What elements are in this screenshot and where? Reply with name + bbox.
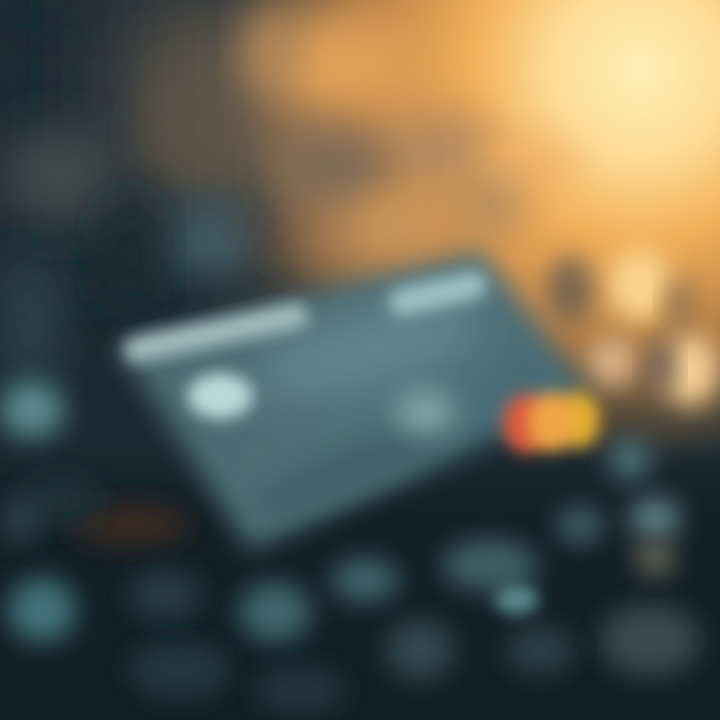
background: dark lower field bbox=[0, 440, 720, 720]
background: golden light bbox=[220, 0, 720, 500]
card: lower shadow tone bbox=[240, 408, 460, 532]
card: name strip highlight bbox=[121, 301, 311, 365]
card: chip highlight bbox=[187, 373, 253, 419]
card: top right logo highlight bbox=[386, 269, 490, 318]
card: payment logo bbox=[503, 392, 600, 454]
card: light top sheen bbox=[245, 285, 495, 415]
card: tilted credit card body bbox=[118, 250, 600, 550]
card: mid glint bbox=[395, 390, 455, 434]
bokeh: lower dark field with teal spots bbox=[0, 382, 700, 714]
